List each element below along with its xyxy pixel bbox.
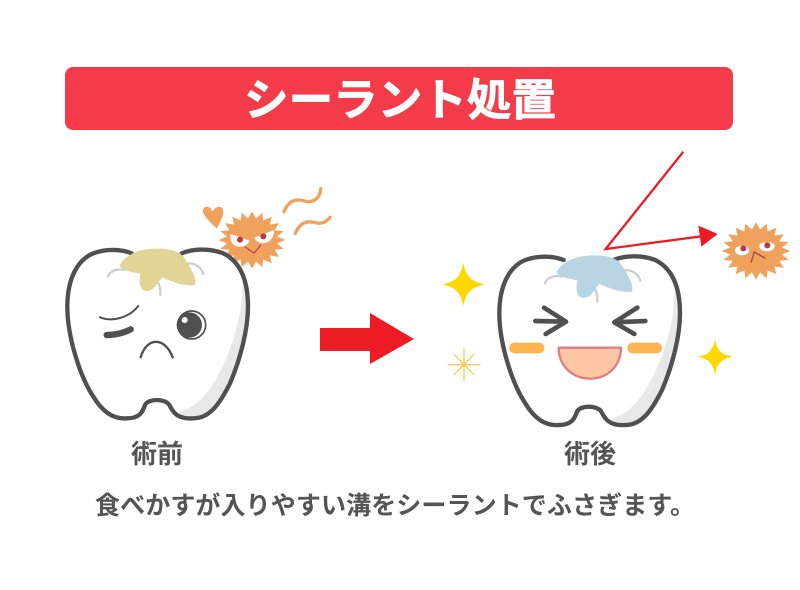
tooth grooves bbox=[545, 270, 640, 302]
bacterium face bbox=[230, 230, 274, 253]
title banner bbox=[65, 67, 733, 130]
thin sparkle bbox=[448, 349, 480, 380]
smiling mouth bbox=[559, 348, 621, 379]
icon: heart bbox=[203, 207, 223, 228]
icon: angry bacterium bbox=[219, 211, 285, 269]
icon: defeated bacterium bbox=[722, 222, 790, 280]
tooth body bbox=[499, 256, 680, 425]
tooth shading bbox=[610, 287, 680, 425]
open eye bbox=[177, 311, 206, 339]
tooth grooves bbox=[108, 263, 203, 295]
caries patch bbox=[119, 249, 195, 291]
closed left eye bbox=[535, 308, 566, 334]
large sparkle bbox=[442, 263, 485, 306]
closed right eye bbox=[614, 308, 645, 334]
big red arrow bbox=[320, 313, 414, 364]
small sparkle bbox=[698, 339, 733, 375]
caption: 食べかすが入りやすい溝をシーラントでふさぎます。 bbox=[95, 491, 695, 520]
icon: wavy germ top bbox=[284, 189, 321, 212]
before-treatment illustration bbox=[67, 189, 330, 418]
sad mouth bbox=[141, 342, 173, 357]
thin red arrow bbox=[606, 152, 718, 249]
tooth outline bbox=[499, 256, 680, 425]
tooth body bbox=[67, 250, 248, 418]
tooth outline bbox=[67, 250, 248, 418]
right cheek bbox=[627, 343, 662, 353]
label: after: 術後 bbox=[564, 439, 616, 469]
after-treatment tooth bbox=[499, 255, 680, 425]
tooth shading bbox=[178, 280, 248, 418]
happy face bbox=[509, 308, 662, 379]
left cheek bbox=[509, 343, 544, 353]
sealant patch bbox=[556, 255, 632, 298]
title text: シーラント処置 bbox=[244, 76, 556, 125]
winking eye bbox=[100, 306, 138, 335]
icon: wavy germ bottom bbox=[295, 217, 330, 233]
sparkles and thin arrow bbox=[442, 152, 790, 380]
label: before: 術前 bbox=[131, 439, 183, 469]
